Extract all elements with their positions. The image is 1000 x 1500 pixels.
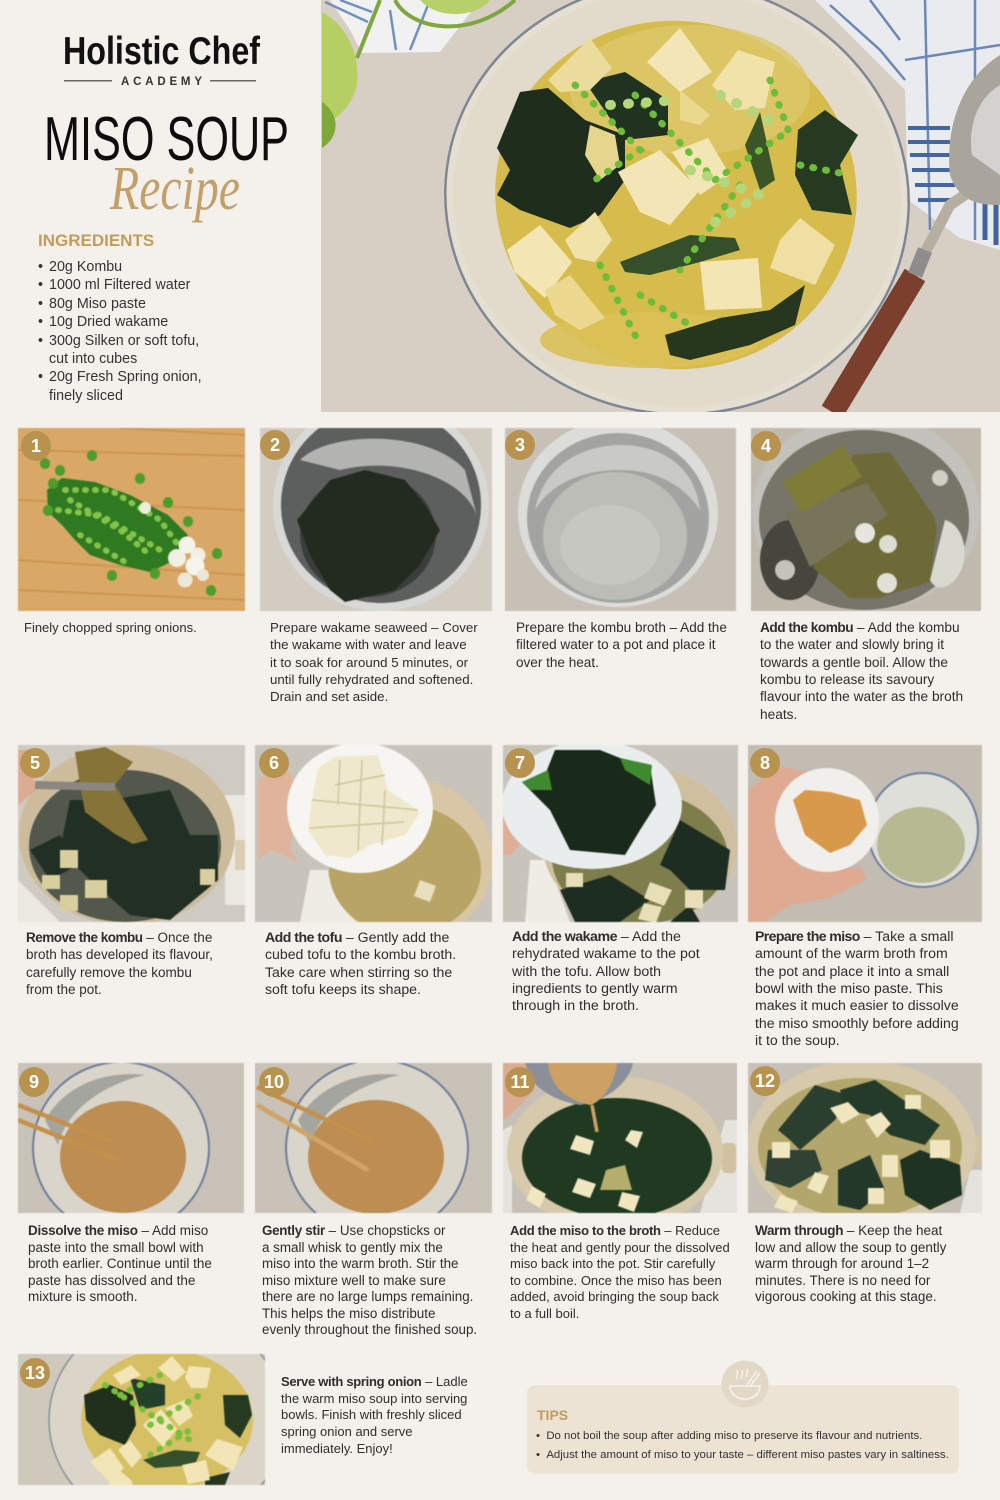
step 7 text: ingredients to gently warm [512,981,678,997]
photo: filtered water in pot [504,428,736,612]
number badge 10 [259,1067,289,1097]
step 7 text: rehydrated wakame to the pot [512,946,700,962]
step 8 panel [748,744,982,1048]
number badge 7: 7 [515,753,525,773]
step 2 text: until fully rehydrated and softened. [270,672,473,687]
ingredients list: 80g Miso paste [49,296,146,312]
step 8 text [755,928,959,1048]
step 8 text: it to the soup. [755,1032,840,1048]
step 4 text: Add the kombu – Add the kombu [760,620,960,635]
soup bowl [417,0,937,444]
step 13 text: bowls. Finish with freshly sliced [281,1407,462,1422]
title script: Recipe [109,155,240,223]
step 5 text: broth has developed its flavour, [26,947,213,962]
step 2 panel [260,427,492,704]
step 11 text: added, avoid bringing the soup back [510,1289,719,1304]
step 9 text: Dissolve the miso – Add miso [28,1223,208,1238]
step 8 text: amount of the warm broth from [755,945,948,961]
number badge 5: 5 [30,753,40,773]
tips list: • Do not boil the soup after adding miso to preserve its flavour and nutrients. [536,1430,922,1442]
step 10 text: miso into the warm broth. Stir the [262,1256,458,1271]
photo: finished soup [18,1354,265,1485]
photo: chopped spring onions [17,427,246,612]
step 13 text: the warm miso soup into serving [281,1391,467,1406]
ingredients list: finely sliced [49,388,123,404]
number badge 12: 12 [755,1071,775,1091]
step 5 panel [18,744,246,997]
number badge 3: 3 [515,435,525,455]
number badge 1: 1 [31,436,41,456]
step 6 text: soft tofu keeps its shape. [265,981,421,997]
step 12 text: vigorous cooking at this stage. [755,1289,937,1304]
step 3 text: over the heat. [516,655,599,670]
step 6 text: Add the tofu – Gently add the [265,929,449,945]
step 11 text [510,1223,730,1320]
step 1 panel [17,427,246,635]
ingredients list: 20g Kombu [49,259,122,275]
ingredients list: 10g Dried wakame [49,314,168,330]
logo subtitle: ACADEMY [121,76,202,88]
number badge 6 [259,748,289,778]
step 3 text: filtered water to a pot and place it [516,637,716,652]
title [44,105,289,223]
step 6 text: cubed tofu to the kombu broth. [265,946,456,962]
number badge 8: 8 [760,753,770,773]
ingredients list [38,259,202,404]
number badge 6: 6 [269,753,279,773]
step 9 text: paste into the small bowl with [28,1240,204,1254]
plant [322,12,357,125]
photo: warming soup [748,1062,982,1214]
step 12 panel [748,1062,982,1304]
green onions [575,80,850,345]
step 7 text [512,929,700,1014]
number badge 13: 13 [25,1363,45,1383]
step 9 panel [17,1062,244,1304]
photo: removing kombu from pot [18,744,246,923]
step 6 text [265,929,456,997]
step 5 text [26,930,213,997]
tips panel [527,1360,959,1474]
photo: kombu in water [750,428,982,612]
number badge 10: 10 [264,1072,284,1092]
step 2 text: the wakame with water and leave [270,637,467,652]
number badge 11: 11 [510,1072,530,1092]
hero photo: bowl of miso soup [321,0,1000,412]
tips box background [527,1385,959,1474]
step 12 text: warm through for around 1–2 [755,1256,929,1271]
wakame [497,88,625,228]
ingredients list: 1000 ml Filtered water [49,277,190,293]
number badge 5 [20,748,50,778]
step 8 text: makes it much easier to dissolve [755,997,959,1013]
step 7 text: through in the broth. [512,998,639,1014]
photo: adding tofu [254,744,492,923]
step 10 text: This helps the miso distribute [262,1306,435,1320]
step 13 text: Serve with spring onion – Ladle [281,1374,468,1389]
ingredients list: • [38,296,43,312]
ingredients list: 300g Silken or soft tofu, [49,333,199,349]
step 3 text: Prepare the kombu broth – Add the [516,620,727,635]
ingredients list: • [38,333,43,349]
step 5 text: Remove the kombu – Once the [26,930,212,945]
step 11 text: Add the miso to the broth – Reduce [510,1223,720,1238]
step 7 text: Add the wakame – Add the [512,929,681,945]
photo: stirring miso [254,1062,492,1214]
photo: wakame soaking [260,427,492,612]
step 8 text: bowl with the miso paste. This [755,980,943,996]
tips list [536,1427,949,1465]
step 4 text: kombu to release its savoury [760,672,934,687]
brand logo [63,30,261,88]
tofu cubes [647,28,712,92]
step 8 text: Prepare the miso – Take a small [755,928,954,944]
step 12 text: minutes. There is no need for [755,1272,930,1288]
step 11 text: the heat and gently pour the dissolved [510,1240,730,1254]
number badge 9: 9 [29,1072,39,1092]
step 13 panel [18,1353,468,1486]
step 4 text [760,620,963,722]
step 9 text [28,1223,212,1304]
ingredients list: 20g Fresh Spring onion, [49,369,202,385]
step 13 text [281,1374,468,1458]
step 10 panel [254,1062,492,1337]
step 7 text: with the tofu. Allow both [512,964,661,980]
number badge 4 [751,431,781,461]
step 3 panel [504,428,736,670]
step 4 text: to the water and slowly bring it [760,637,944,652]
ingredients list: cut into cubes [49,351,137,367]
step 10 text: miso mixture well to make sure [262,1272,446,1288]
step 4 text: heats. [760,707,797,722]
photo: preparing miso [748,744,982,922]
step 9 text: paste has dissolved and the [28,1272,195,1288]
step 6 text: Take care when stirring so the [265,964,452,980]
step 11 text: to combine. Once the miso has been [510,1272,722,1288]
step 9 text: broth earlier. Continue until the [28,1256,212,1271]
spoon [832,275,915,412]
step 10 text [262,1223,477,1337]
step 2 text: Drain and set aside. [270,689,388,704]
number badge 2 [260,430,290,460]
photo: adding wakame [502,744,738,923]
step 5 text: from the pot. [26,982,102,997]
step 10 text: evenly throughout the finished soup. [262,1322,477,1337]
number badge 13 [20,1358,50,1388]
step 10 text: there are no large lumps remaining. [262,1289,473,1304]
number badge 2: 2 [270,435,280,455]
photo: pouring miso into broth [502,1062,738,1214]
step 12 text [755,1223,946,1304]
step 11 panel [502,1062,738,1320]
step 8 text: the miso smoothly before adding [755,1015,959,1031]
icon: soup bowl [721,1360,769,1408]
step 10 text: a small whisk to gently mix the [262,1240,443,1254]
number badge 4: 4 [761,436,771,456]
tips heading: TIPS [537,1407,568,1423]
step 2 text: it to soak for around 5 minutes, or [270,655,468,670]
number badge 9 [19,1067,49,1097]
ingredients list: • [38,314,43,330]
step 11 text: to a full boil. [510,1306,579,1320]
step 13 text: immediately. Enjoy! [281,1441,393,1456]
step 7 panel [502,744,738,1014]
step 12 text: Warm through – Keep the heat [755,1223,942,1238]
step 12 text: low and allow the soup to gently [755,1240,946,1254]
step 1 text: Finely chopped spring onions. [24,620,197,635]
photo: dissolving miso [17,1062,244,1214]
number badge 8 [750,748,780,778]
number badge 12 [750,1066,780,1096]
step 11 text: miso back into the pot. Stir carefully [510,1256,715,1271]
step 8 text: the pot and place it into a small [755,963,949,979]
step 10 text: Gently stir – Use chopsticks or [262,1223,446,1238]
ingredients list: • [38,369,43,385]
step 4 panel [750,428,982,722]
ingredients list: • [38,277,43,293]
step 9 text: mixture is smooth. [28,1289,138,1304]
ingredients list: • [38,259,43,275]
number badge 1 [21,431,51,461]
tips list: • Adjust the amount of miso to your taste – different miso pastes vary in saltiness. [536,1449,949,1461]
step 4 text: flavour into the water as the broth [760,689,963,704]
step 13 text: spring onion and serve [281,1424,413,1439]
step 5 text: carefully remove the kombu [26,965,192,980]
number badge 3 [505,430,535,460]
ingredients heading: INGREDIENTS [38,231,154,250]
step 2 text: Prepare wakame seaweed – Cover [270,620,478,635]
right towel [815,0,1000,250]
left towel [330,0,480,53]
step 3 text [516,620,727,670]
number badge 11 [505,1067,535,1097]
step 4 text: towards a gentle boil. Allow the [760,655,948,670]
step 2 text [270,620,478,704]
step 6 panel [254,744,492,997]
number badge 7 [505,748,535,778]
